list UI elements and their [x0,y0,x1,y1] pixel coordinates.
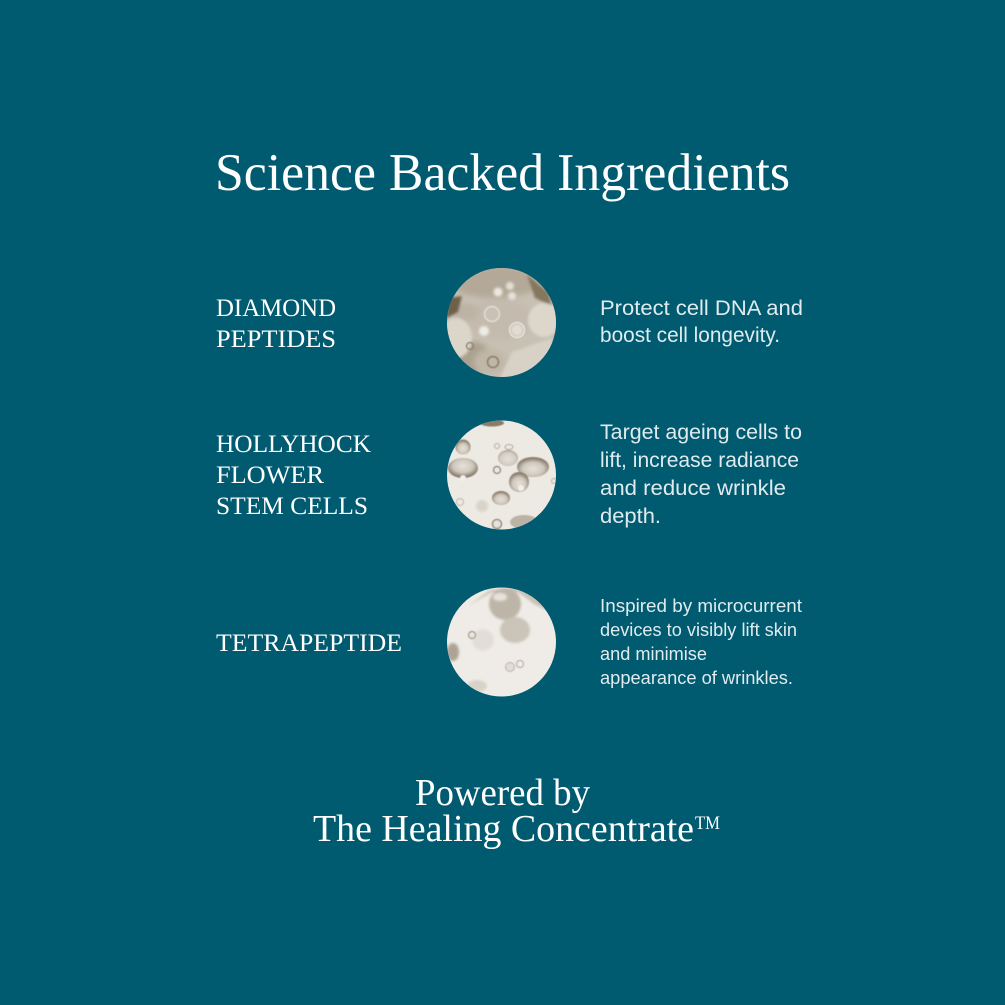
description: tetrapeptide: Inspired by microcurrent [600,595,802,616]
description: tetrapeptide: devices to visibly lift skin [600,619,797,640]
row: tetrapeptide [216,586,802,697]
footer tagline [313,772,720,850]
footer tagline: Powered by [415,772,590,814]
ingredient name: hollyhock flower stem cells: STEM CELLS [216,493,368,520]
ingredient name: hollyhock flower stem cells: HOLLYHOCK [216,431,371,458]
photo: tetrapeptide bubbles [447,586,557,697]
description: diamond peptides: Protect cell DNA and [600,297,803,320]
footer tagline: TM [695,813,720,834]
description: tetrapeptide: appearance of wrinkles. [600,667,793,688]
description: hollyhock: lift, increase radiance [600,449,799,472]
photo: diamond peptides bubbles [447,268,556,377]
title: Science Backed Ingredients [215,144,790,202]
row: hollyhock flower stem cells [216,420,802,530]
description: hollyhock: and reduce wrinkle [600,477,786,500]
description: tetrapeptide [600,595,802,688]
description: diamond peptides [600,297,803,347]
ingredient name: diamond peptides: PEPTIDES [216,326,336,353]
description: hollyhock: Target ageing cells to [600,421,802,444]
footer tagline: The Healing Concentrate [313,808,694,850]
description: diamond peptides: boost cell longevity. [600,324,780,347]
ingredient name: hollyhock flower stem cells: FLOWER [216,462,324,489]
description: hollyhock: depth. [600,505,661,528]
ingredient name: diamond peptides [216,295,336,353]
row: diamond peptides [216,266,803,378]
description: hollyhock [600,421,802,528]
photo: hollyhock bubbles [447,420,557,530]
ingredient name: tetrapeptide: TETRAPEPTIDE [216,630,402,657]
ingredient name: diamond peptides: DIAMOND [216,295,336,322]
ingredient name: hollyhock flower stem cells [216,431,371,520]
description: tetrapeptide: and minimise [600,643,707,664]
